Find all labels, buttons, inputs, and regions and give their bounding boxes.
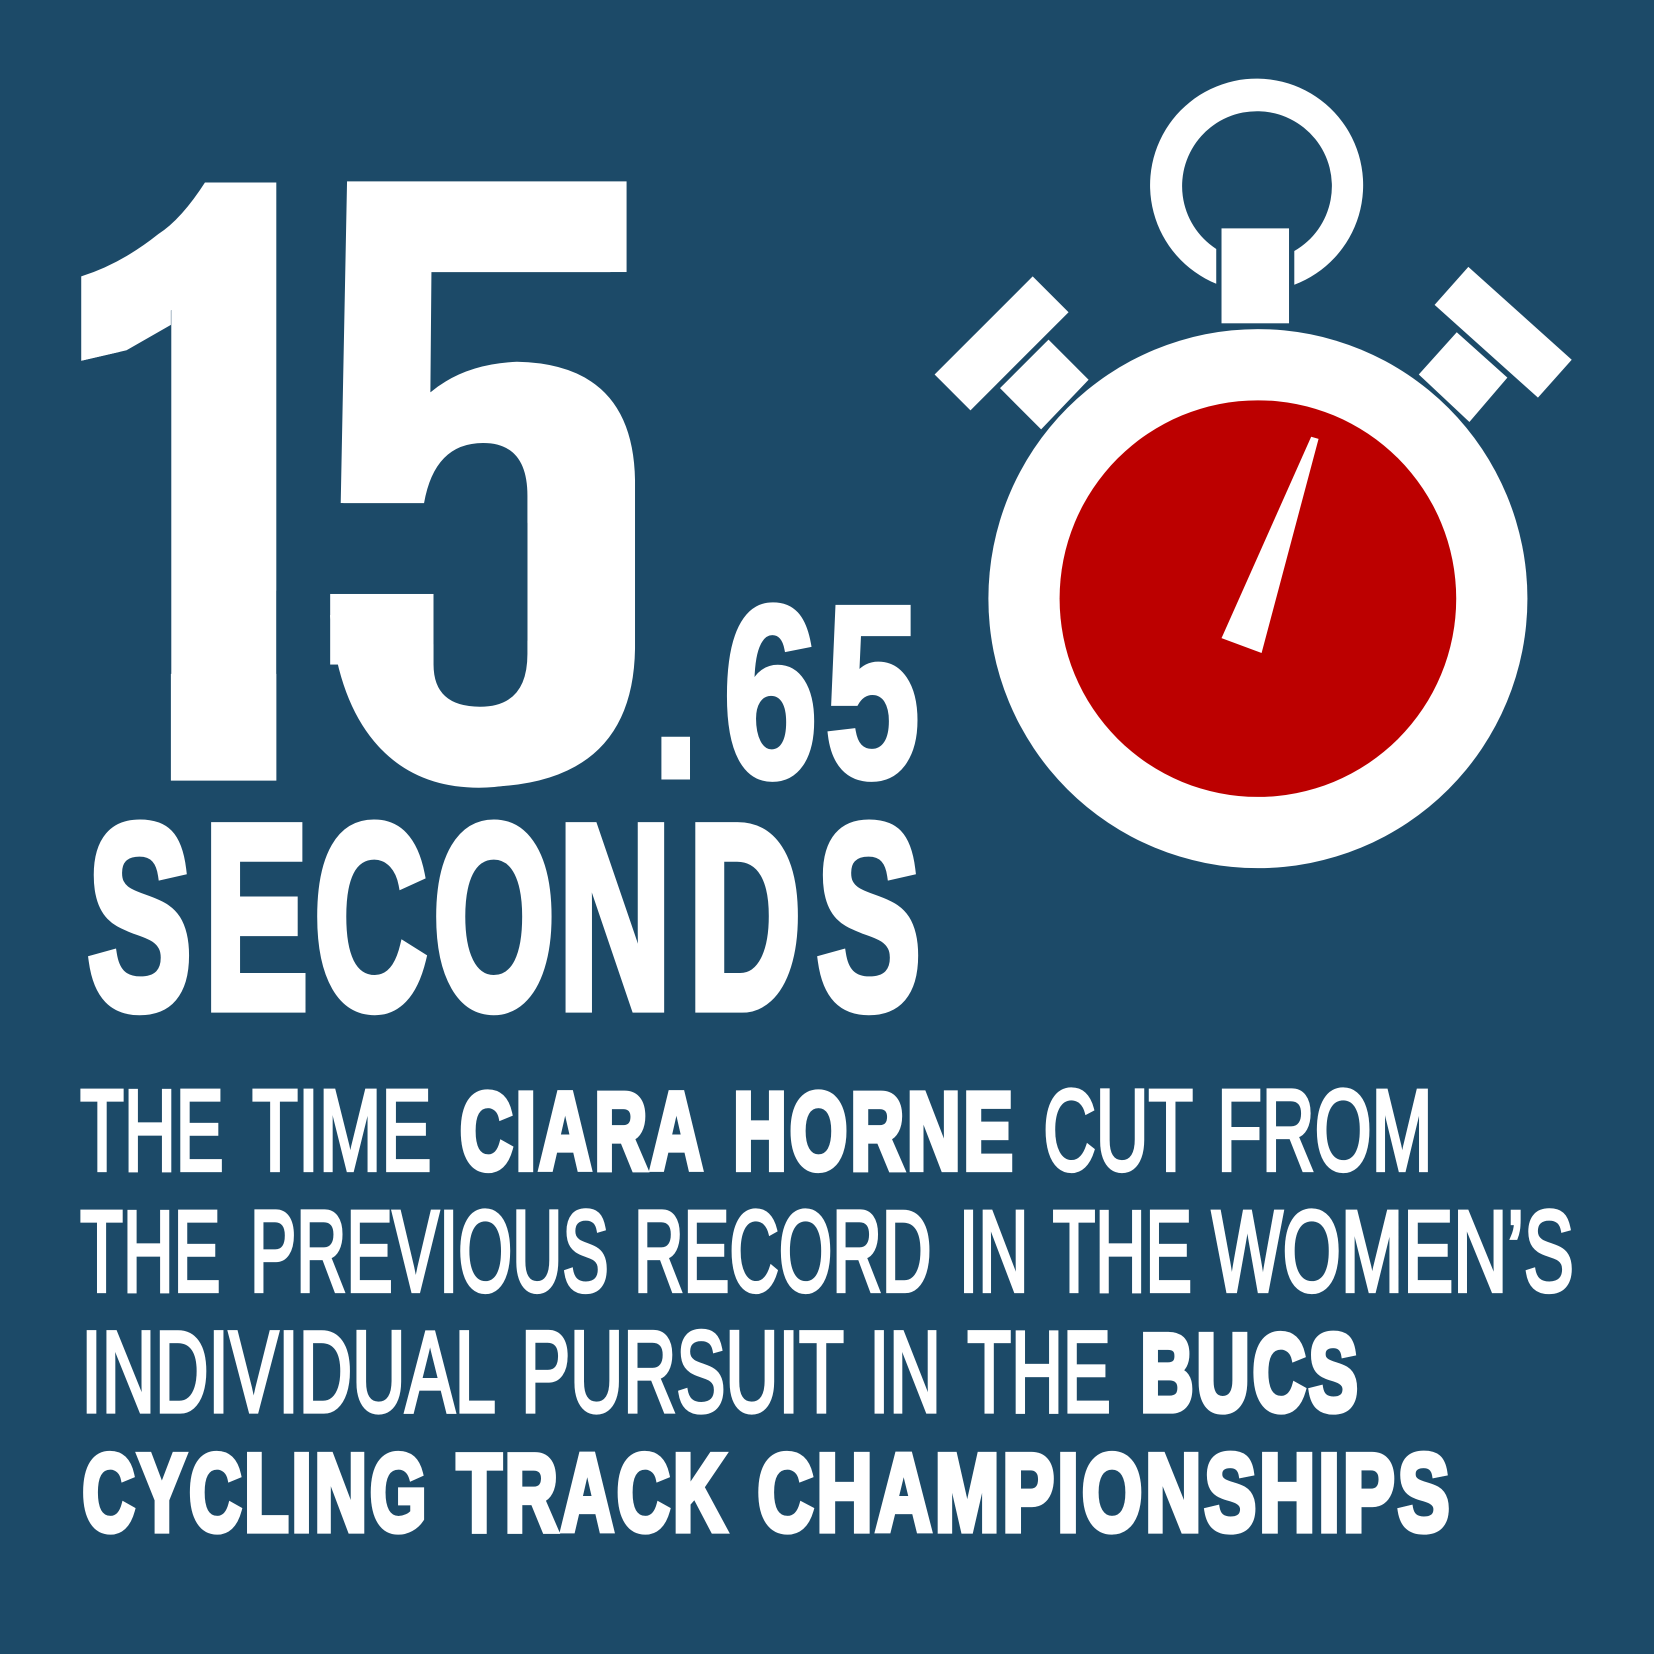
line 1: THE bbox=[80, 1067, 224, 1195]
line 2: RECORD bbox=[634, 1188, 931, 1316]
stopwatch body bbox=[988, 329, 1527, 868]
line 1: TIME bbox=[252, 1067, 431, 1195]
line 2: PREVIOUS bbox=[250, 1188, 609, 1316]
line 2: IN bbox=[959, 1188, 1028, 1316]
line 4 bbox=[82, 1433, 1453, 1555]
decimal .65: .65 bbox=[652, 555, 920, 829]
line 2: THE bbox=[1053, 1188, 1192, 1316]
description text bbox=[80, 1067, 1574, 1555]
line 2 bbox=[80, 1188, 1574, 1316]
line 4: CYCLING bbox=[82, 1433, 429, 1555]
line 1: CUT bbox=[1043, 1067, 1193, 1195]
stopwatch crown bbox=[1222, 228, 1289, 323]
line 1: HORNE bbox=[733, 1071, 1016, 1193]
line 1: FROM bbox=[1217, 1067, 1432, 1195]
big number 15: 1 bbox=[28, 11, 388, 948]
line 3: BUCS bbox=[1140, 1312, 1361, 1434]
line 3: PURSUIT bbox=[521, 1308, 844, 1436]
line 1: CIARA bbox=[460, 1071, 706, 1193]
big number 15: 5 bbox=[321, 10, 642, 947]
right push button bbox=[1419, 267, 1572, 422]
stopwatch top ring bbox=[1150, 79, 1363, 285]
line 2: THE bbox=[80, 1188, 220, 1316]
line 1 bbox=[80, 1067, 1432, 1195]
line 3: INDIVIDUAL bbox=[81, 1308, 496, 1436]
red dial bbox=[1060, 400, 1456, 797]
stopwatch needle bbox=[1222, 437, 1319, 653]
left push button bbox=[935, 276, 1089, 429]
heading: SECONDS: SECONDS bbox=[87, 771, 921, 1063]
line 4: TRACK bbox=[457, 1433, 729, 1555]
headline number: 15.65 bbox=[21, 10, 920, 948]
line 3 bbox=[81, 1308, 1361, 1436]
line 3: THE bbox=[967, 1308, 1111, 1436]
line 3: IN bbox=[869, 1308, 941, 1436]
icon: stopwatch bbox=[935, 79, 1572, 868]
